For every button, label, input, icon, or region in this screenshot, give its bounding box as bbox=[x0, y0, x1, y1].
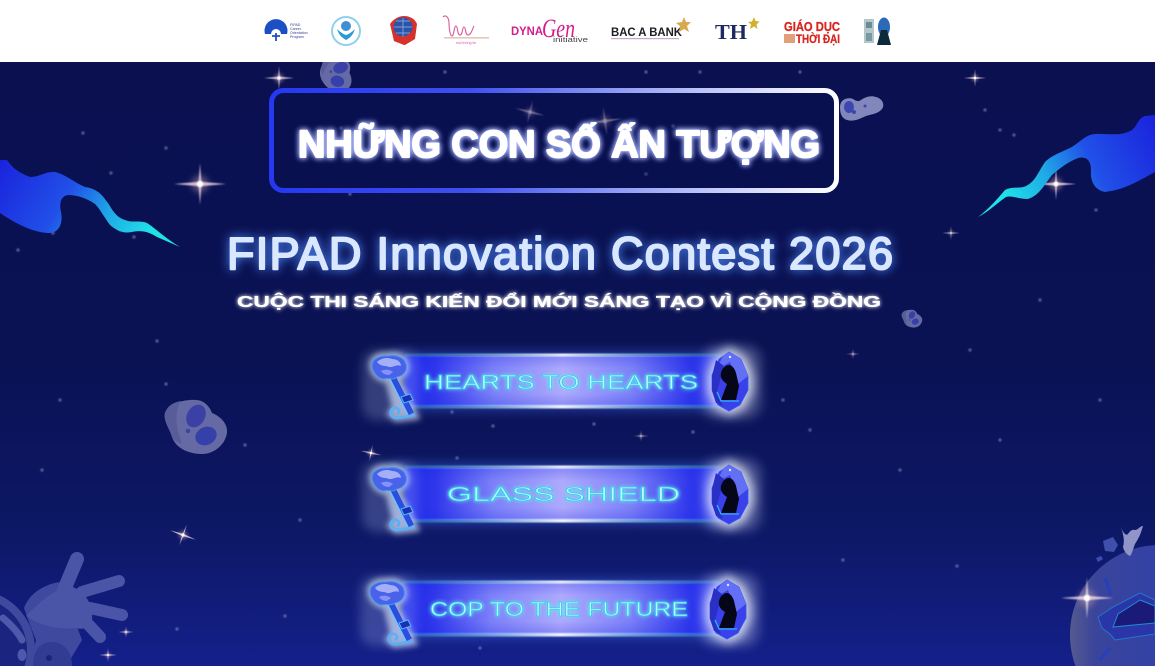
icon: key bbox=[360, 576, 416, 646]
title frame bbox=[272, 90, 836, 190]
icon: keyhole gem bbox=[702, 345, 762, 419]
logo: TH bbox=[715, 17, 760, 44]
astronaut hand bbox=[0, 559, 122, 666]
contest subtitle: CUỘC THI SÁNG KIẾN ĐỔI MỚI SÁNG TẠO VÌ CỘNG ĐỒNG bbox=[237, 293, 881, 311]
frame border bbox=[272, 90, 836, 190]
logo: Bac A Bank: BAC A BANK bbox=[611, 25, 682, 39]
logo: FIPAD career orientation: Program bbox=[290, 35, 304, 39]
logo: Bac A Bank bbox=[611, 17, 691, 39]
palm and fingers bbox=[64, 559, 122, 637]
logo: DynaGen initiative: initiative bbox=[553, 35, 588, 44]
banner label: GLASS SHIELD bbox=[447, 484, 680, 506]
planet bbox=[1070, 526, 1155, 666]
logo: Giao duc thoi dai: GIÁO DỤC bbox=[784, 19, 841, 34]
asteroid: small right bbox=[902, 310, 922, 328]
logo: DynaGen initiative: DYNA bbox=[511, 24, 543, 38]
main heading: NHỮNG CON SỐ ẤN TƯỢNG bbox=[298, 121, 820, 166]
logo: DynaGen initiative bbox=[511, 14, 588, 44]
logo: pink script: mọi thông tin bbox=[456, 41, 476, 45]
logo: red and blue globe shield bbox=[390, 16, 417, 45]
banner: Hearts to Hearts bbox=[362, 345, 762, 420]
sponsor logos bbox=[264, 14, 891, 46]
sleeve bbox=[24, 582, 82, 666]
spike and rock bbox=[1121, 526, 1143, 556]
contest title: FIPAD Innovation Contest 2026 bbox=[227, 228, 893, 279]
logo: keyhole building bbox=[864, 18, 891, 45]
icon: key bbox=[362, 462, 418, 532]
banner: Glass Shield bbox=[362, 458, 762, 532]
logo: FIPAD career orientation bbox=[264, 19, 308, 41]
chain bbox=[1100, 578, 1111, 660]
header band bbox=[0, 0, 1155, 62]
banner label: HEARTS TO HEARTS bbox=[424, 372, 698, 394]
banner label: COP TO THE FUTURE bbox=[430, 599, 688, 621]
logo: round blue emblem bbox=[332, 17, 360, 45]
gear bbox=[33, 642, 72, 666]
sparkle on planet bbox=[1061, 577, 1113, 619]
shield emblem bbox=[1098, 593, 1155, 640]
helmet bbox=[0, 596, 35, 666]
asteroid: top bbox=[311, 48, 362, 98]
icon: key bbox=[362, 350, 418, 420]
logo: FIPAD career orientation: FIPAD bbox=[290, 23, 301, 27]
icon: keyhole gem bbox=[702, 458, 762, 532]
right wave ribbon bbox=[978, 115, 1155, 217]
banner: Cop to the Future bbox=[360, 573, 760, 647]
logo: Giao duc thoi dai bbox=[784, 19, 841, 46]
logo: DynaGen initiative: Gen bbox=[542, 14, 575, 43]
logo: FIPAD career orientation: Career bbox=[290, 27, 302, 31]
logo: Giao duc thoi dai: THỜI ĐẠI bbox=[796, 31, 840, 46]
logo: FIPAD career orientation: Orientation bbox=[290, 31, 308, 35]
asteroid: right of title bbox=[840, 96, 883, 121]
logo: TH: TH bbox=[715, 20, 747, 44]
asteroid: large left bbox=[165, 400, 227, 454]
left wave ribbon bbox=[0, 160, 180, 247]
logo: pink script bbox=[443, 16, 489, 45]
icon: keyhole gem bbox=[700, 573, 760, 647]
